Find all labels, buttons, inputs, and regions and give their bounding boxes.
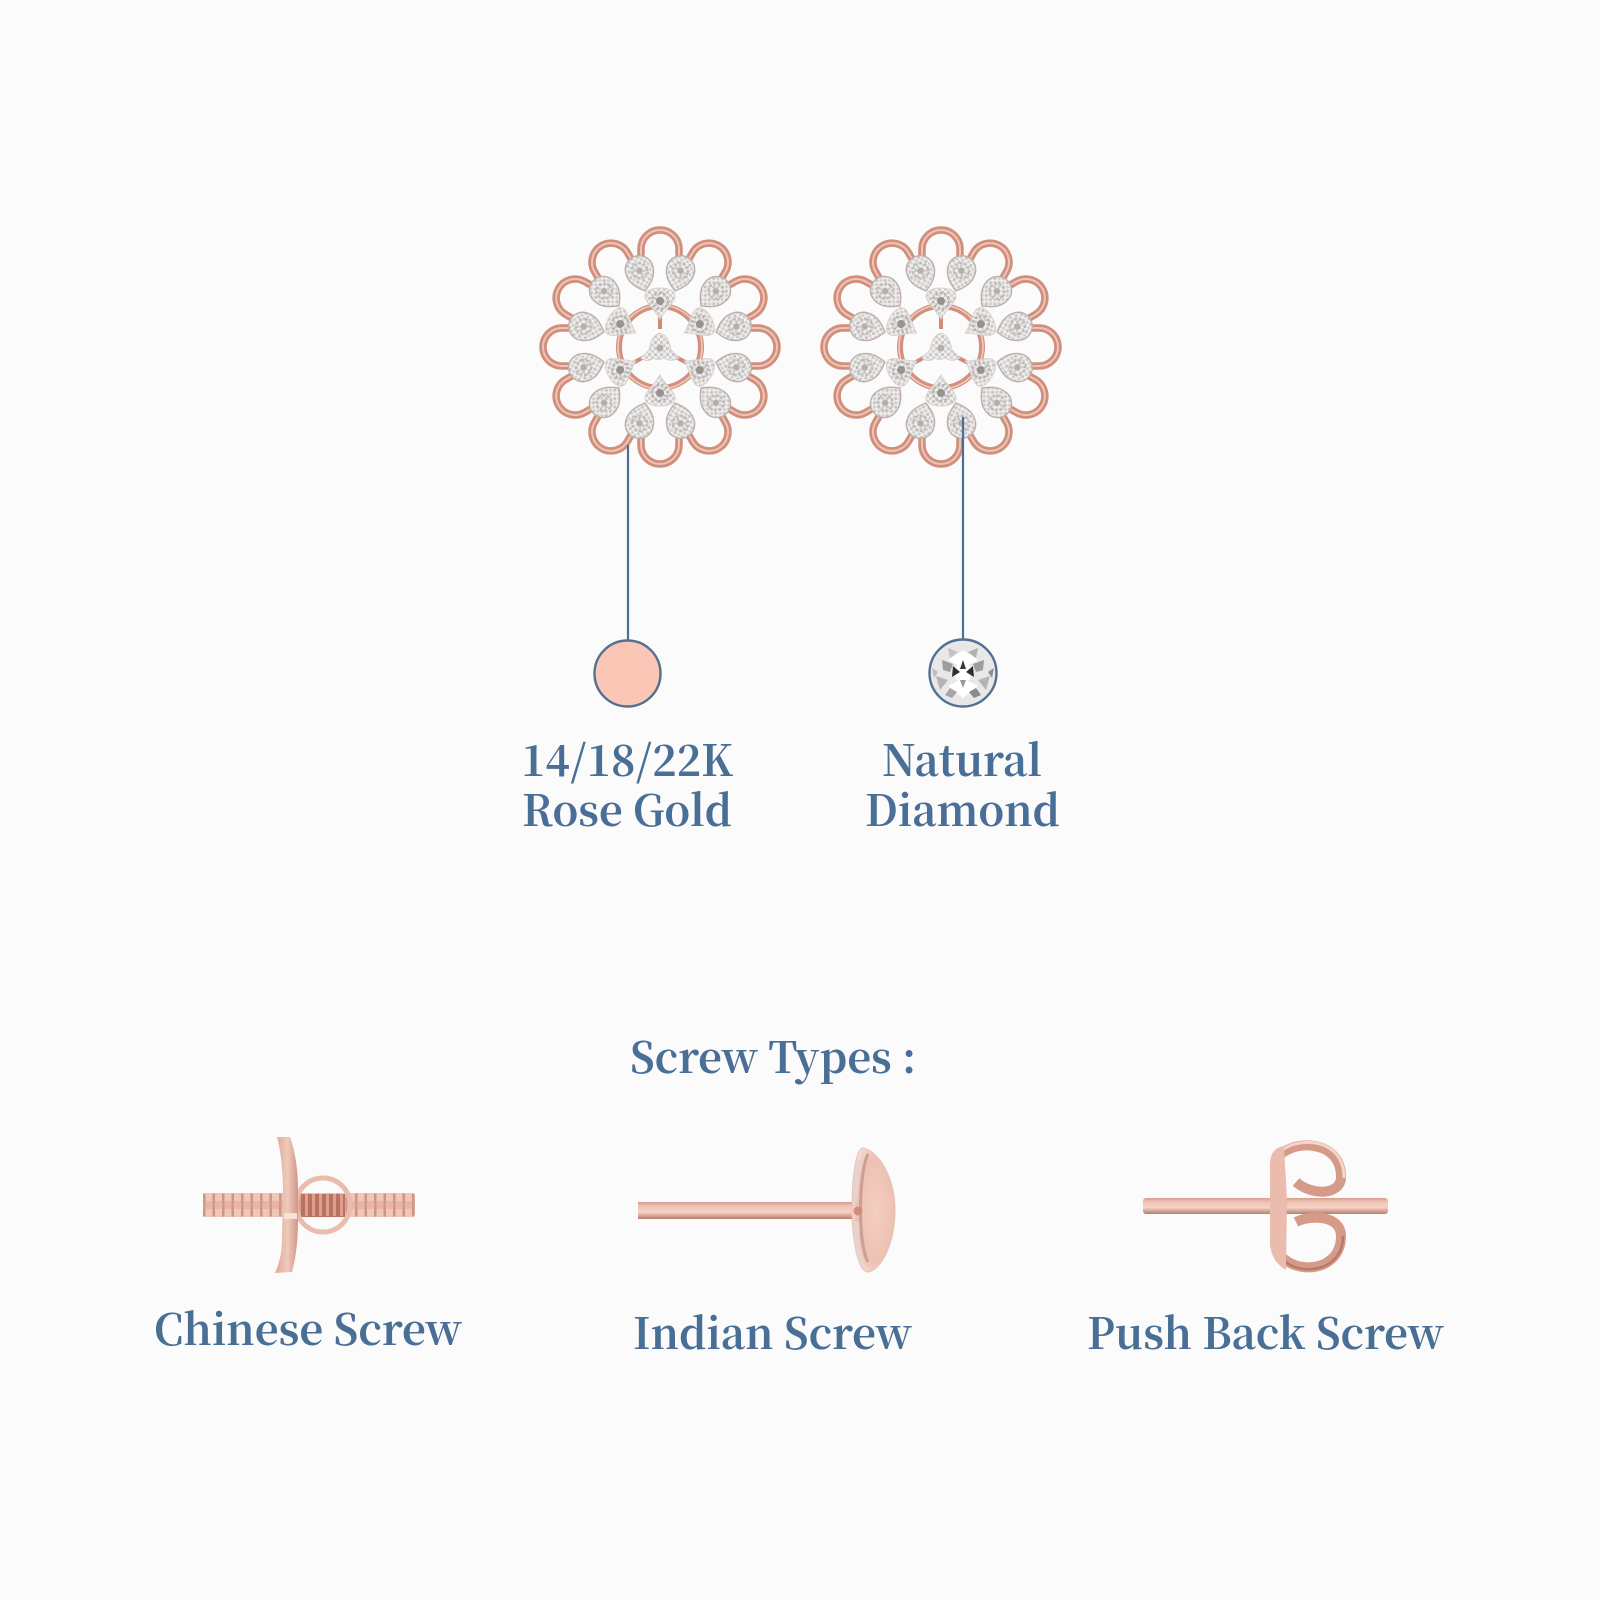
icon: left rose gold earring	[543, 230, 777, 464]
label: 14/18/22K Rose Gold: 14/18/22K	[521, 728, 733, 789]
label: Natural Diamond	[865, 728, 1060, 839]
heading: Screw Types: Screw Types :	[630, 1025, 916, 1086]
icon: Indian screw	[638, 1148, 895, 1272]
icon: right rose gold earring	[824, 230, 1058, 464]
label: 14/18/22K Rose Gold: Rose Gold	[522, 778, 732, 839]
icon: Chinese screw	[203, 1137, 415, 1273]
label: Chinese Screw: Chinese Screw	[154, 1297, 462, 1358]
label: Natural Diamond: Diamond	[865, 778, 1060, 839]
swatch: rose gold	[594, 640, 660, 706]
icon: push back screw	[1143, 1142, 1388, 1270]
label: Indian Screw: Indian Screw	[633, 1301, 912, 1362]
label: 14/18/22K Rose Gold	[521, 728, 733, 839]
swatch: natural diamond	[930, 640, 996, 706]
callout line: rose gold	[627, 445, 629, 641]
label: Natural Diamond: Natural	[882, 728, 1042, 789]
callout line: diamond	[962, 417, 964, 640]
label: Push Back Screw: Push Back Screw	[1087, 1301, 1444, 1362]
